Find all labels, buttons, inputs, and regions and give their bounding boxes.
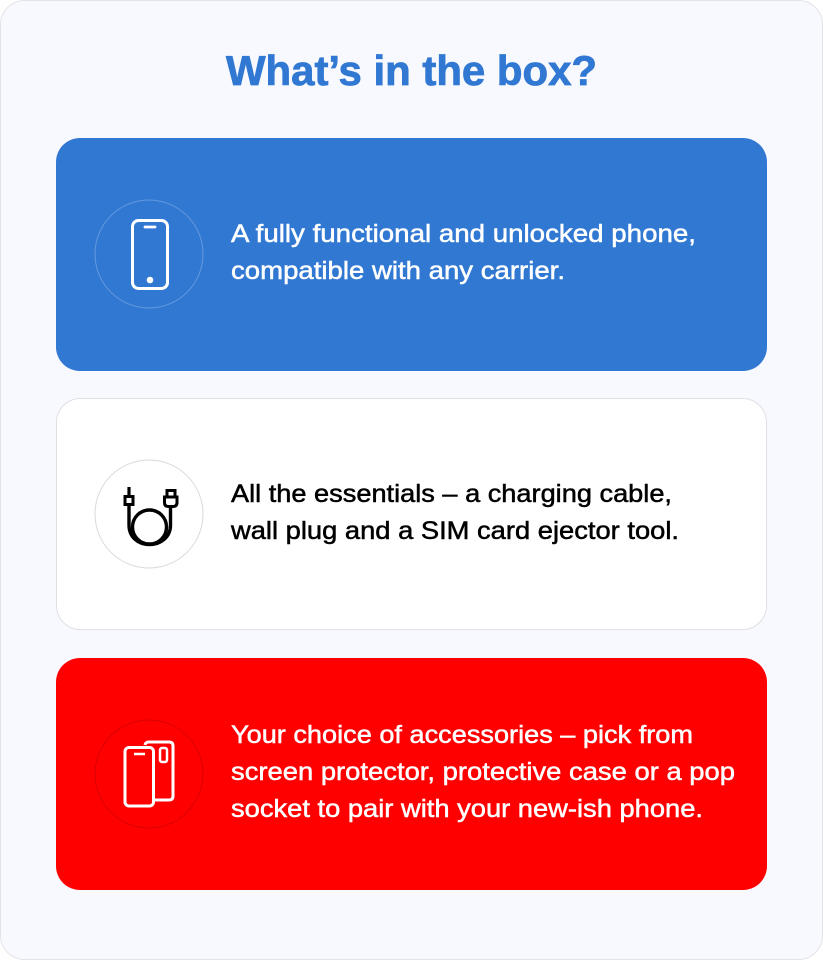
text: essentials description [230,480,679,545]
text: accessories description: socket to pair with your new-ish phone. [231,795,703,823]
icon: phone cases [95,720,203,828]
panel: phone [56,138,767,371]
card background: blue [56,138,767,371]
card background: white [56,398,766,630]
icon: phone [95,200,203,308]
text: essentials description: wall plug and a SIM card ejector tool. [230,517,679,545]
text: accessories description: screen protector, protective case or a pop [231,758,735,786]
text: essentials description: All the essentials – a charging cable, [231,480,672,508]
icon: charging cable [95,460,203,568]
text: phone description: A fully functional and unlocked phone, [231,220,696,248]
text: phone description: compatible with any carrier. [231,257,565,285]
panel: essentials [56,398,766,630]
panel: accessories [56,658,767,890]
text: accessories description: Your choice of accessories – pick from [231,721,693,749]
card background: red [56,658,767,890]
text: phone description [231,220,696,285]
title: What’s in the box? [226,47,597,94]
text: accessories description [231,721,735,823]
